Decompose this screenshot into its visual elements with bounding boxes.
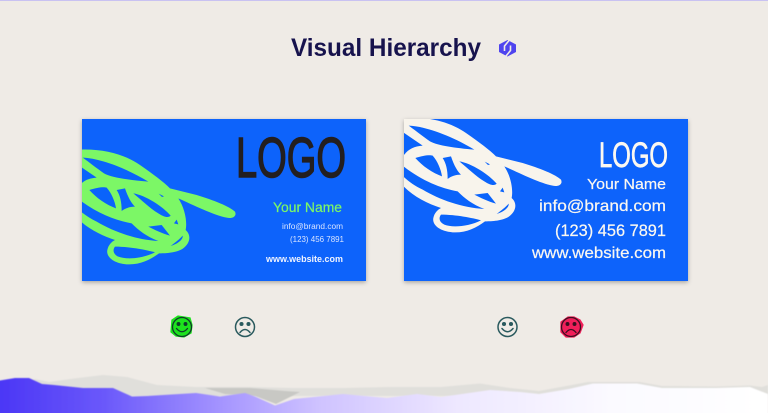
icon: happy face neutral <box>498 318 517 336</box>
panel: business card, strong hierarchy <box>399 117 688 281</box>
icon: brand hexagon mark <box>499 40 516 56</box>
scribble: cream <box>399 117 562 232</box>
title: Visual Hierarchy <box>291 34 481 62</box>
phone: white: (123) 456 7891 <box>555 221 666 240</box>
scribble: green <box>73 149 236 264</box>
icon: sad face highlighted red <box>561 317 583 337</box>
icon: sad face neutral <box>236 318 254 336</box>
email: small: info@brand.com <box>282 222 343 231</box>
logo: white: LOGO <box>599 136 668 175</box>
icon: happy face highlighted green <box>171 316 192 337</box>
website: small bold: www.website.com <box>265 254 343 265</box>
name: green: Your Name <box>273 200 342 215</box>
email: white: info@brand.com <box>539 198 666 215</box>
torn paper edge with gradient <box>0 375 768 413</box>
website: white: www.website.com <box>531 245 666 262</box>
phone: small: (123) 456 7891 <box>290 234 344 244</box>
name: white: Your Name <box>587 176 666 193</box>
logo: large dark: LOGO <box>236 126 346 190</box>
panel: business card, weak hierarchy <box>73 119 366 281</box>
